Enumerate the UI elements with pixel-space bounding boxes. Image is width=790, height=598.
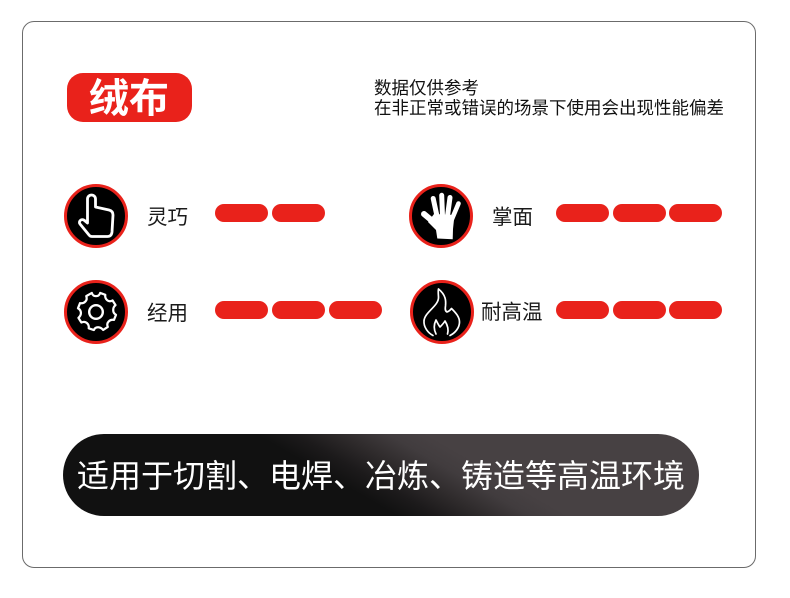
icon: flame xyxy=(410,280,474,344)
label: 耐高温: 耐高温 xyxy=(481,301,542,324)
banner: applicable scenarios xyxy=(63,434,699,516)
title badge: 绒布 xyxy=(67,73,192,122)
disclaimer text xyxy=(374,78,724,118)
rating bar: 经用 3 of 3 xyxy=(215,301,382,319)
label: 灵巧: 灵巧 xyxy=(147,206,188,229)
icon: gear xyxy=(64,280,128,344)
rating bar: 掌面 3 of 3 xyxy=(556,204,722,222)
icon: pointing hand xyxy=(64,184,128,248)
label: 掌面: 掌面 xyxy=(492,206,533,229)
icon: open palm xyxy=(409,184,473,248)
banner: applicable scenarios: 适用于切割、电焊、冶炼、铸造等高温环境 xyxy=(77,458,685,494)
disclaimer text: 在非正常或错误的场景下使用会出现性能偏差 xyxy=(374,98,724,118)
title badge: 绒布: 绒布 xyxy=(89,77,169,121)
rating bar: 耐高温 3 of 3 xyxy=(556,301,722,319)
disclaimer text: 数据仅供参考 xyxy=(374,78,479,98)
label: 经用: 经用 xyxy=(147,302,188,325)
rating bar: 灵巧 2 of 3 xyxy=(215,204,325,222)
